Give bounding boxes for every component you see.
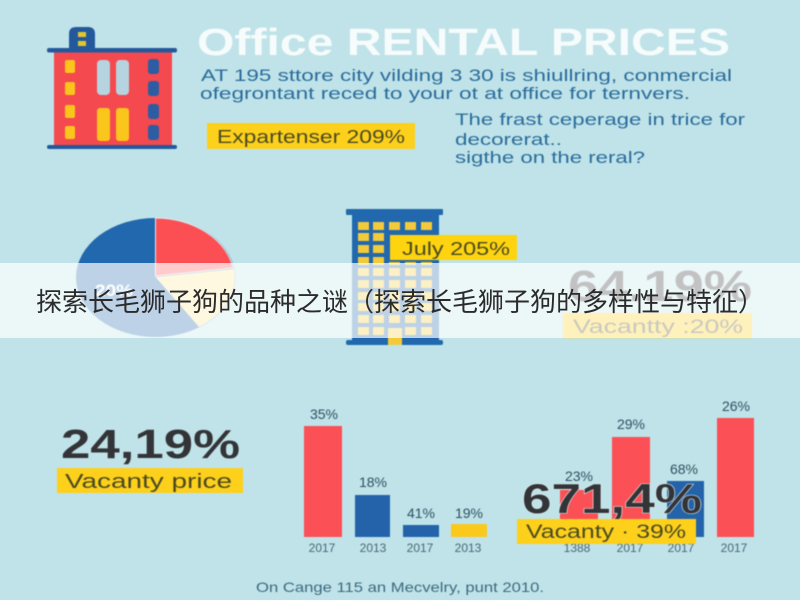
pie chart: 20% <box>95 281 133 300</box>
bar chart: left: 18% <box>359 474 387 490</box>
callout: vacancy 20% <box>563 313 752 338</box>
bar chart: left: 2017 <box>407 541 434 555</box>
overlay headline band: 探索长毛狮子狗的品种之谜（探索长毛狮子狗的多样性与特征） <box>36 287 764 317</box>
pie chart <box>76 218 235 337</box>
callout: vacancy 39%: Vacanty · 39% <box>526 522 686 543</box>
bar chart: right: 2017 <box>721 541 748 555</box>
bar chart: right: 2017 <box>617 541 644 555</box>
side text: The frast ceperage in trice for <box>455 110 745 129</box>
intro text <box>200 66 732 103</box>
bar chart: left: 41% <box>407 505 435 521</box>
icon: red office building <box>47 27 177 149</box>
bar chart: right: 68% <box>670 461 698 477</box>
overlay headline band <box>0 263 800 338</box>
stat: 671,4%: 671,4% <box>522 475 702 522</box>
side text <box>455 110 745 167</box>
title: Office RENTAL PRICES <box>197 22 730 64</box>
bar chart: left <box>304 406 487 555</box>
bar chart: left: 2013 <box>455 541 482 555</box>
side text: sigthe on the reral? <box>455 148 645 167</box>
bar chart: right: 29% <box>617 416 645 432</box>
bar chart: left: 19% <box>455 505 483 521</box>
intro text: ofegrontant reced to your ot at office for ternvers. <box>200 84 690 103</box>
side text: decorerat.. <box>455 130 562 149</box>
bar chart: left: 2017 <box>309 541 336 555</box>
callout: expenses tag: Expartenser 209% <box>217 127 405 147</box>
callout: vacancy 20%: Vacantty :20% <box>573 317 743 338</box>
bar chart: left: 35% <box>310 406 338 422</box>
callout: July tag <box>390 235 517 260</box>
callout: vacancy price: Vacanty price <box>65 471 232 493</box>
callout: July tag: July 205% <box>402 239 510 259</box>
icon: blue tower building <box>346 209 443 345</box>
bar chart: right: 26% <box>722 398 750 414</box>
bar chart: left: 2013 <box>360 541 387 555</box>
footer note: On Cange 115 an Mecvelry, punt 2010. <box>256 579 544 595</box>
intro text: AT 195 sttore city vilding 3 30 is shiullring, conmercial <box>201 66 732 85</box>
callout: vacancy price <box>57 468 243 493</box>
bar chart: right: 2017 <box>668 541 695 555</box>
stat: 24,19%: 24,19% <box>61 421 240 467</box>
bar chart: right: 23% <box>565 468 593 484</box>
callout: expenses tag <box>207 123 415 149</box>
bar chart: right: 1388 <box>564 541 591 555</box>
callout: vacancy 39% <box>517 519 696 544</box>
stat: 64.19%: 64.19% <box>568 262 752 311</box>
bar chart: right <box>560 398 754 555</box>
